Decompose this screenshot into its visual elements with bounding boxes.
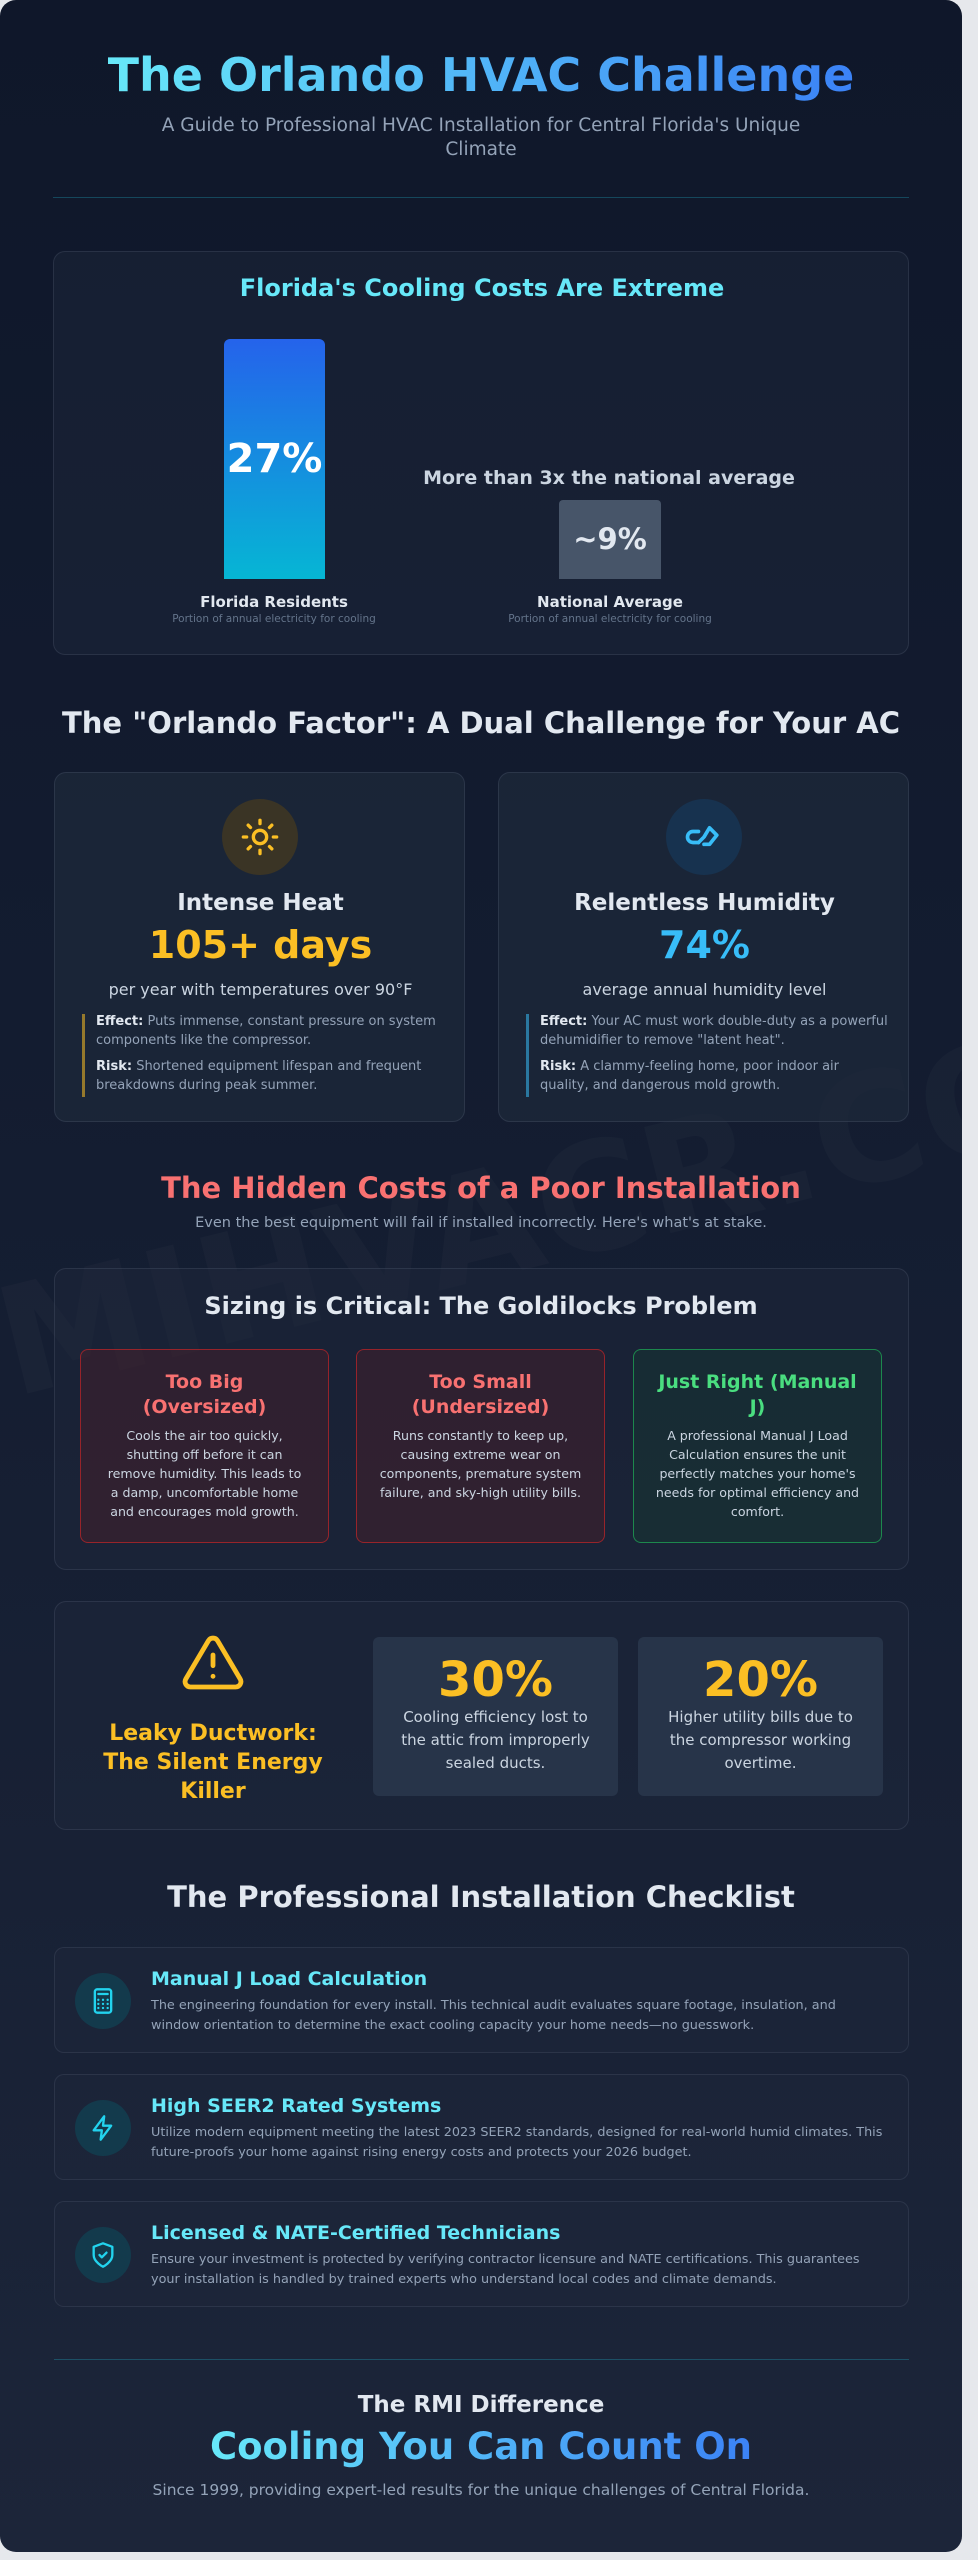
box: too big: Cools the air too quickly, <box>126 1428 283 1443</box>
box: too small: Runs constantly to keep up, <box>393 1428 568 1443</box>
item: Manual J: The engineering foundation for every install. This technical audit evaluates square footage, insulation, and window orientation to determine the exact cooling capacity your home needs—no guesswork. <box>151 1998 836 2033</box>
box: too big: a damp, uncomfortable home <box>111 1485 298 1500</box>
item: SEER2 <box>54 2074 909 2180</box>
heading: leaky ductwork: Leaky Ductwork: The Silent Energy Killer <box>103 1721 323 1804</box>
stat: 30%: Cooling efficiency lost to the attic from improperly sealed ducts. <box>401 1708 590 1772</box>
box: too small <box>356 1349 605 1543</box>
title: The Orlando HVAC Challenge <box>108 48 854 102</box>
box: too big: shutting off before it can <box>127 1447 282 1462</box>
item: SEER2: High SEER2 Rated Systems <box>151 2095 441 2117</box>
stat: 20%: Higher utility bills due to the compressor working overtime. <box>668 1708 853 1772</box>
item: Manual J: Manual J Load Calculation <box>151 1968 427 1990</box>
text: effect/risk humidity <box>526 1014 888 1097</box>
box: just right: Just Right (Manual J) <box>658 1371 857 1418</box>
item: Manual J <box>54 1947 909 2053</box>
label: national <box>508 593 712 625</box>
panel: sizing <box>54 1268 909 1570</box>
item: licensed <box>54 2201 909 2307</box>
footer: RMI difference: The RMI Difference <box>358 2392 604 2418</box>
box: too small: failure, and sky-high utility bills. <box>380 1485 581 1500</box>
label: Florida: Florida Residents <box>200 593 348 611</box>
label: Florida <box>172 593 376 625</box>
bar: national 9% <box>559 500 661 579</box>
box: too small: Too Small (Undersized) <box>412 1371 549 1418</box>
heading: cooling costs: Florida's Cooling Costs Are Extreme <box>240 274 724 302</box>
text: effect/risk heat: Risk: Shortened equipment lifespan and frequent breakdowns during peak summer. <box>96 1059 421 1093</box>
heading: Intense Heat: Intense Heat <box>177 890 344 916</box>
footer: since 1999: Since 1999, providing expert-led results for the unique challenges of Central Florida. <box>153 2481 809 2499</box>
stat: 105+ days: 105+ days <box>149 923 372 967</box>
bar: Florida 27%: 27% <box>227 436 322 482</box>
heading: Relentless Humidity: Relentless Humidity <box>574 890 835 916</box>
bar: national 9%: ~9% <box>573 522 647 556</box>
icon: warning <box>182 1636 244 1690</box>
callout: 3x: More than 3x the national average <box>423 467 795 489</box>
panel: intense heat <box>54 772 465 1122</box>
footer: tagline: Cooling You Can Count On <box>210 2425 752 2468</box>
icon: humidity <box>666 799 742 875</box>
box: just right: needs for optimal efficiency and <box>656 1485 859 1500</box>
item: licensed: Ensure your investment is protected by verifying contractor licensure and NATE certifications. This guarantees your installation is handled by trained experts who understand local codes and climate demands. <box>151 2252 860 2287</box>
box: just right <box>633 1349 882 1543</box>
box: just right: perfectly matches your home's <box>659 1466 856 1481</box>
heading: Orlando factor: The "Orlando Factor": A Dual Challenge for Your AC <box>62 706 900 740</box>
stat: 30% <box>373 1637 618 1796</box>
panel: intense heat: per year with temperatures over 90°F <box>109 980 412 999</box>
label: national: Portion of annual electricity for cooling <box>508 613 712 625</box>
box: too small: components, premature system <box>380 1466 581 1481</box>
panel: humidity <box>498 772 909 1122</box>
text: effect/risk humidity: Effect: Your AC must work double-duty as a powerful dehumidifier to remove "latent heat". <box>540 1014 888 1048</box>
stat: 20%: 20% <box>703 1652 818 1708</box>
text: effect/risk heat <box>82 1014 444 1097</box>
box: just right: comfort. <box>731 1504 784 1519</box>
subtitle: Climate <box>445 139 517 160</box>
panel: leaky ductwork <box>54 1601 909 1830</box>
box: too big <box>80 1349 329 1543</box>
subtitle <box>162 115 800 160</box>
box: too big: remove humidity. This leads to <box>108 1466 301 1481</box>
stat: 30%: 30% <box>438 1652 553 1708</box>
panel: humidity: average annual humidity level <box>583 980 826 999</box>
item: SEER2: Utilize modern equipment meeting the latest 2023 SEER2 standards, designed for real-world humid climates. This future-proofs your home against rising energy costs and protects your 2026 budget. <box>151 2125 882 2160</box>
bar: Florida 27% <box>224 339 325 579</box>
box: too big: Too Big (Oversized) <box>143 1371 266 1418</box>
panel: cooling costs <box>53 251 909 655</box>
box: just right: Calculation ensures the unit <box>669 1447 846 1462</box>
text: effect/risk humidity: Risk: A clammy-feeling home, poor indoor air quality, and dangerous mold growth. <box>540 1059 839 1093</box>
heading: hidden costs: The Hidden Costs of a Poor Installation <box>161 1171 801 1205</box>
box: just right: A professional Manual J Load <box>667 1428 848 1443</box>
subheading: hidden costs: Even the best equipment will fail if installed incorrectly. Here's what's at stake. <box>195 1215 767 1231</box>
heading: checklist: The Professional Installation Checklist <box>167 1880 795 1914</box>
label: Florida: Portion of annual electricity for cooling <box>172 613 376 625</box>
stat: 20% <box>638 1637 883 1796</box>
subtitle: A Guide to Professional HVAC Installation for Central Florida's Unique <box>162 115 800 136</box>
heading: sizing: Sizing is Critical: The Goldilocks Problem <box>204 1292 758 1320</box>
icon: sun <box>222 799 298 875</box>
box: too big: and encourages mold growth. <box>110 1504 299 1519</box>
box: too small: causing extreme wear on <box>401 1447 560 1462</box>
text: effect/risk heat: Effect: Puts immense, constant pressure on system components like the compressor. <box>96 1014 436 1048</box>
stat: 74%: 74% <box>659 923 750 967</box>
label: national: National Average <box>537 593 683 611</box>
item: licensed: Licensed & NATE-Certified Technicians <box>151 2222 560 2244</box>
